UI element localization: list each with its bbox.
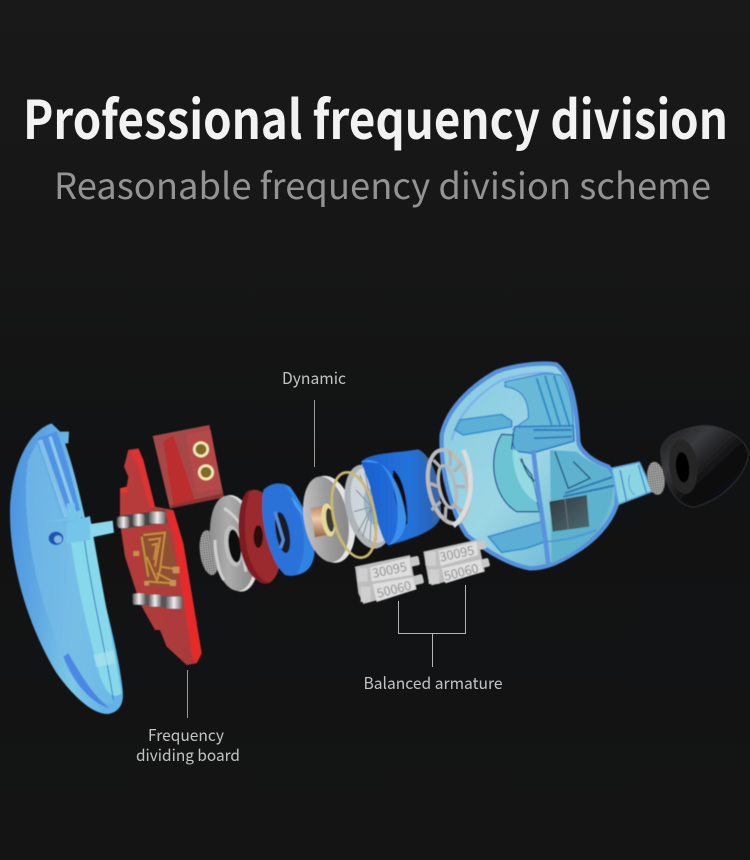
exploded earphone, left parts xyxy=(10,423,224,714)
icon: balanced armature left xyxy=(355,555,424,604)
crescent baffle xyxy=(494,434,539,512)
icon: blue driver housing xyxy=(361,449,441,545)
dark internal component xyxy=(549,495,589,532)
icon: silver grille ring xyxy=(422,446,475,527)
subtitle: Reasonable frequency division scheme xyxy=(54,158,711,210)
armature label 50060: 50060 xyxy=(374,575,413,602)
armature label 30095: 30095 xyxy=(370,556,409,582)
armature label 50060: 50060 xyxy=(442,558,480,585)
icon: faceplate shell xyxy=(10,423,123,714)
icon: gold voice coil ring xyxy=(325,468,383,562)
icon: nozzle mesh xyxy=(645,461,667,496)
nozzle mesh and ear tip xyxy=(645,425,749,507)
upper inner cavity xyxy=(505,373,573,432)
icon: nozzle tube xyxy=(612,462,653,504)
icon: dynamic driver magnet and coil xyxy=(297,472,362,567)
armature label 30095: 30095 xyxy=(438,540,476,566)
board lower silver contacts xyxy=(133,593,183,609)
lower strut xyxy=(488,522,545,552)
icon: blue spacer ring xyxy=(262,483,314,576)
board upper silver contacts xyxy=(117,510,167,529)
driver stack xyxy=(197,446,490,604)
callout: Frequency dividing board xyxy=(136,670,240,766)
icon: black ear tip xyxy=(661,425,749,507)
icon: silver front plate xyxy=(204,492,265,595)
board circuit traces xyxy=(133,530,179,587)
main shell and nozzle xyxy=(442,364,653,568)
callout: Balanced armature: Balanced armature xyxy=(364,670,503,694)
icon: red connector block xyxy=(153,425,224,508)
front rim band xyxy=(533,450,548,566)
icon: driver mesh filter xyxy=(197,529,222,576)
upper strut xyxy=(455,414,512,435)
icon: balanced armature right xyxy=(423,539,490,585)
icon: frequency dividing board xyxy=(117,448,202,665)
connector pin holes xyxy=(193,441,214,480)
icon: red damping disc xyxy=(233,487,287,586)
callout: Dynamic xyxy=(282,365,346,467)
icon: diaphragm xyxy=(337,460,399,553)
lower right cavity xyxy=(550,450,614,563)
callout: Frequency dividing board: Frequency xyxy=(148,722,225,746)
central strut xyxy=(512,426,574,453)
callout: Frequency dividing board: dividing board xyxy=(136,742,240,766)
callout: Balanced armature xyxy=(364,585,503,694)
icon: main blue shell xyxy=(442,364,617,568)
callout: Dynamic: Dynamic xyxy=(282,365,346,389)
